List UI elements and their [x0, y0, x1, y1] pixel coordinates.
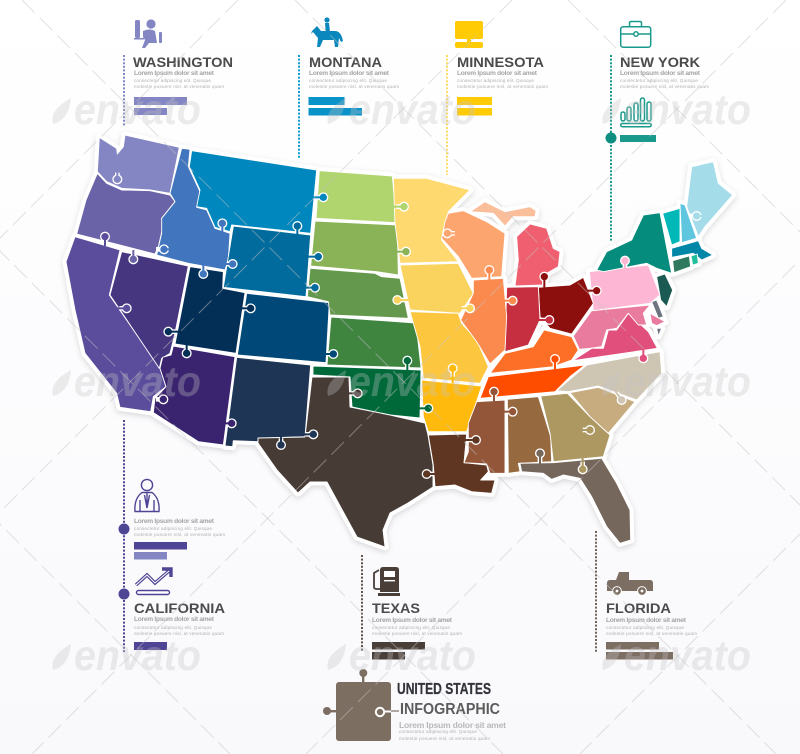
text block	[620, 70, 709, 89]
Rhode Island	[691, 254, 698, 265]
Kansas	[327, 317, 421, 368]
western states	[66, 135, 408, 447]
leader line: Texas	[361, 555, 363, 652]
Nebraska	[307, 268, 408, 318]
text block: consectetur adipiscing elit. Quisque	[134, 625, 212, 630]
Kentucky	[490, 330, 578, 373]
text block: Lorem Ipsum dolor sit amet	[309, 70, 390, 77]
North Carolina	[557, 352, 662, 400]
Virginia	[573, 313, 657, 361]
leader line: Washington	[123, 55, 125, 127]
South Dakota	[311, 221, 398, 275]
heading: NEW YORK	[620, 54, 700, 70]
New York	[597, 213, 672, 273]
eastern states	[393, 162, 733, 543]
icon: person at desk	[134, 19, 162, 48]
leader line: Minnesota	[446, 55, 448, 175]
Wyoming	[223, 226, 311, 297]
title line 2: INFOGRAPHIC	[400, 701, 500, 718]
text block: Lorem Ipsum dolor sit amet	[606, 617, 687, 624]
leader line: New York	[610, 55, 612, 242]
California	[66, 237, 166, 412]
Maine	[687, 162, 733, 237]
puzzle knobs on western states	[101, 170, 362, 449]
puzzle knobs on eastern states	[393, 202, 705, 478]
text block	[399, 720, 506, 741]
Tennessee	[480, 365, 585, 398]
Wisconsin	[442, 211, 505, 278]
panel: Florida	[606, 572, 697, 660]
panel: Minnesota	[455, 21, 548, 116]
Illinois	[461, 278, 507, 364]
watermark: envato logos: envato	[74, 632, 201, 680]
text block: Lorem Ipsum dolor sit amet	[457, 70, 538, 77]
text block: Lorem Ipsum dolor sit amet	[134, 518, 215, 525]
Alabama	[507, 397, 552, 473]
Michigan upper peninsula	[470, 202, 536, 226]
text block: Lorem Ipsum dolor sit amet	[620, 70, 701, 77]
New Mexico	[225, 357, 311, 447]
text block: molestie posuere nisl, at venenatis quam	[134, 532, 225, 537]
Colorado	[237, 293, 329, 363]
text block: molestie posuere nisl, at venenatis quam	[309, 84, 399, 89]
bars	[606, 642, 673, 660]
text block: consectetur adipiscing elit. Quisque	[399, 729, 477, 734]
heading: MONTANA	[309, 54, 382, 70]
Georgia	[541, 393, 610, 462]
icon: bar chart	[621, 98, 651, 127]
Delaware	[652, 300, 663, 318]
Oklahoma	[313, 366, 421, 418]
West Virginia	[573, 305, 650, 349]
Idaho	[157, 148, 230, 270]
heading: MINNESOTA	[457, 54, 544, 70]
watermark: envato logos	[52, 86, 751, 680]
Washington	[97, 135, 179, 193]
North Dakota	[316, 171, 397, 223]
panel: people, California side	[118, 479, 225, 560]
title line 1: UNITED STATES	[397, 681, 491, 698]
marker	[606, 132, 616, 144]
text block: molestie posuere nisl, at venenatis quam	[620, 84, 709, 89]
Iowa	[400, 263, 473, 313]
Massachusetts	[672, 241, 713, 260]
Texas	[258, 377, 433, 547]
heading: CALIFORNIA	[134, 600, 225, 616]
Utah	[175, 267, 245, 353]
watermark: envato logos: envato	[74, 358, 201, 406]
bars	[372, 642, 425, 660]
watermark: envato logos: envato	[349, 86, 476, 134]
Minnesota	[393, 178, 470, 263]
Indiana	[505, 287, 540, 352]
leader line: Montana	[298, 55, 300, 158]
Virginia eastern shore	[657, 328, 662, 336]
South Carolina	[570, 387, 635, 433]
Missouri	[410, 312, 488, 383]
text block	[309, 70, 399, 89]
text block: consectetur adipiscing elit. Quisque	[134, 526, 212, 531]
icon: rising arrow	[136, 569, 171, 594]
Mississippi	[464, 400, 505, 473]
Arkansas	[422, 380, 482, 432]
text block: molestie posuere nisl, at venenatis quam	[457, 84, 548, 89]
Ohio	[538, 277, 593, 334]
text block	[134, 518, 225, 537]
panel: Texas	[372, 567, 462, 660]
Connecticut	[673, 256, 691, 273]
Michigan lower peninsula	[515, 224, 560, 286]
Maryland	[650, 313, 665, 326]
bars	[134, 97, 187, 115]
text block	[134, 70, 224, 89]
watermark: envato logos: envato	[624, 358, 751, 406]
Montana	[189, 151, 317, 233]
text block: consectetur adipiscing elit. Quisque	[620, 78, 698, 83]
text block: consectetur adipiscing elit. Quisque	[309, 78, 387, 83]
text block	[606, 617, 697, 636]
Oregon	[77, 173, 175, 254]
bars	[308, 97, 362, 116]
panel: infographic title	[323, 669, 506, 741]
text block: molestie posuere nisl, at venenatis quam	[372, 631, 462, 636]
watermark: envato logos: envato	[624, 86, 751, 134]
watermark: envato logos: envato	[349, 632, 476, 680]
Louisiana	[428, 434, 495, 493]
text block: molestie posuere nisl, at venenatis quam	[134, 84, 224, 89]
icon: pickup truck	[607, 572, 653, 595]
icon: briefcase	[621, 22, 651, 47]
heading: WASHINGTON	[133, 54, 233, 70]
panel: New York	[606, 22, 709, 144]
Pennsylvania	[589, 265, 660, 311]
panel: California	[118, 569, 225, 650]
text block: consectetur adipiscing elit. Quisque	[457, 78, 534, 83]
heading: TEXAS	[372, 600, 420, 616]
state shapes	[66, 135, 733, 547]
text block: Lorem Ipsum dolor sit amet	[372, 617, 453, 624]
heading: FLORIDA	[606, 600, 671, 616]
watermark: envato logos: envato	[624, 632, 751, 680]
watermark: envato logos: envato	[74, 86, 201, 134]
text block	[134, 616, 224, 636]
New Hampshire	[680, 203, 697, 243]
icon: puzzle piece	[323, 669, 399, 741]
bars	[134, 542, 187, 560]
marker	[118, 588, 130, 600]
Florida	[520, 458, 631, 543]
watermark: envato logos: envato	[349, 358, 476, 406]
New Jersey	[657, 274, 673, 307]
text block: Lorem Ipsum dolor sit amet	[134, 616, 215, 623]
panel: Montana	[308, 17, 399, 115]
Arizona	[153, 346, 235, 445]
icon: computer	[455, 21, 483, 48]
text block: consectetur adipiscing elit. Quisque	[134, 78, 211, 83]
icon: person with tie	[135, 479, 159, 512]
Vermont	[663, 208, 680, 245]
Nevada	[110, 252, 188, 368]
bar	[134, 642, 167, 650]
text block: Lorem Ipsum dolor sit amet	[399, 720, 506, 730]
text block: molestie posuere nisl, at venenatis quam	[134, 631, 224, 636]
text block: Lorem Ipsum dolor sit amet	[134, 70, 215, 77]
text block	[372, 617, 462, 636]
leader line: Florida	[595, 531, 597, 652]
text block: consectetur adipiscing elit. Quisque	[606, 625, 684, 630]
text block: molestie posuere nisl, at venenatis quam	[399, 736, 490, 741]
leader line: California	[123, 420, 125, 652]
marker	[118, 524, 130, 534]
text block: molestie posuere nisl, at venenatis quam	[606, 631, 697, 636]
bars	[457, 97, 492, 116]
map of the United States	[66, 135, 733, 547]
icon: fuel pump	[374, 567, 400, 596]
panel: Washington	[133, 19, 233, 115]
icon: horse rider	[311, 17, 343, 47]
text block	[457, 70, 548, 89]
text block: consectetur adipiscing elit. Quisque	[372, 625, 450, 630]
bar	[620, 135, 656, 142]
